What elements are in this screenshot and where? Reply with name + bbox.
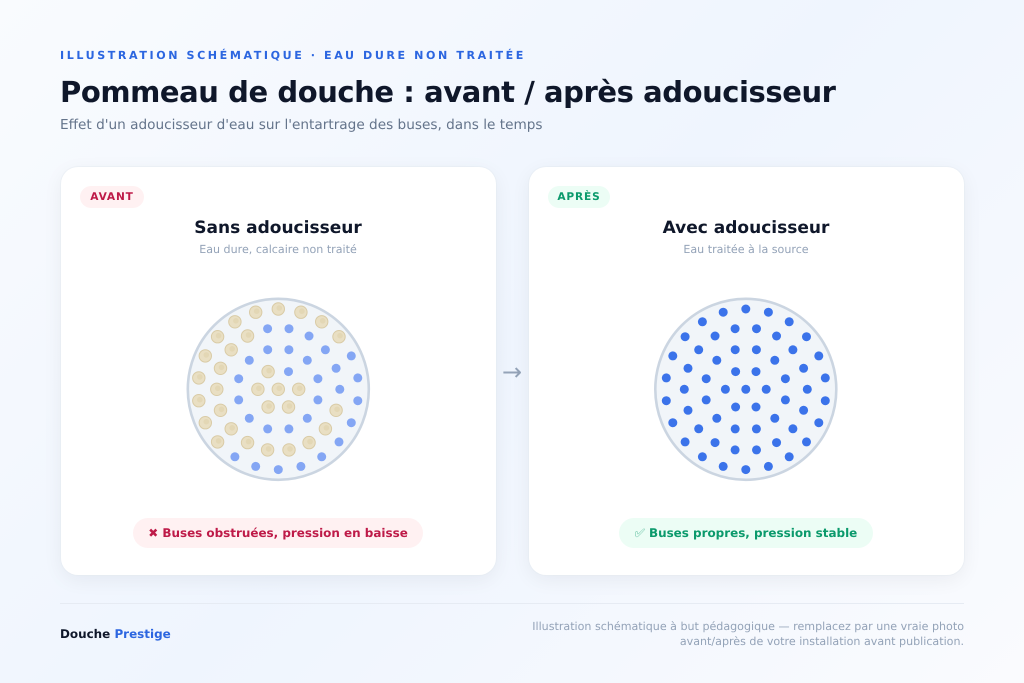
heading: avec adoucisseur: Avec adoucisseur	[663, 218, 829, 238]
status: clean	[619, 518, 873, 548]
eyebrow: ILLUSTRATION SCHÉMATIQUE · EAU DURE NON TRAITÉE	[60, 48, 526, 62]
badge: apres	[548, 186, 610, 208]
panel: apres	[528, 167, 964, 575]
status: clogged	[133, 518, 423, 548]
arrow: →	[502, 358, 522, 386]
badge: avant	[80, 186, 144, 208]
disclaimer: Illustration schématique à but pédagogique — remplacez par une vraie photo	[532, 620, 964, 633]
badge: apres: APRÈS	[557, 191, 601, 203]
disclaimer: avant/après de votre installation avant publication.	[680, 635, 964, 648]
status: clogged: ✖ Buses obstruées, pression en baisse	[148, 526, 408, 540]
caption: eau dure: Eau dure, calcaire non traité	[199, 243, 357, 256]
subtitle: Effet d'un adoucisseur d'eau sur l'entartrage des buses, dans le temps	[60, 117, 543, 133]
brand: Douche Prestige	[60, 627, 171, 641]
title: Pommeau de douche : avant / après adoucisseur	[60, 74, 836, 108]
badge: avant: AVANT	[90, 191, 134, 203]
panel: avant	[60, 167, 496, 575]
heading: sans adoucisseur: Sans adoucisseur	[194, 218, 362, 238]
status: clean: ✅︎ Buses propres, pression stable	[635, 526, 857, 540]
caption: eau traitee: Eau traitée à la source	[683, 243, 809, 256]
disclaimer	[532, 620, 964, 648]
